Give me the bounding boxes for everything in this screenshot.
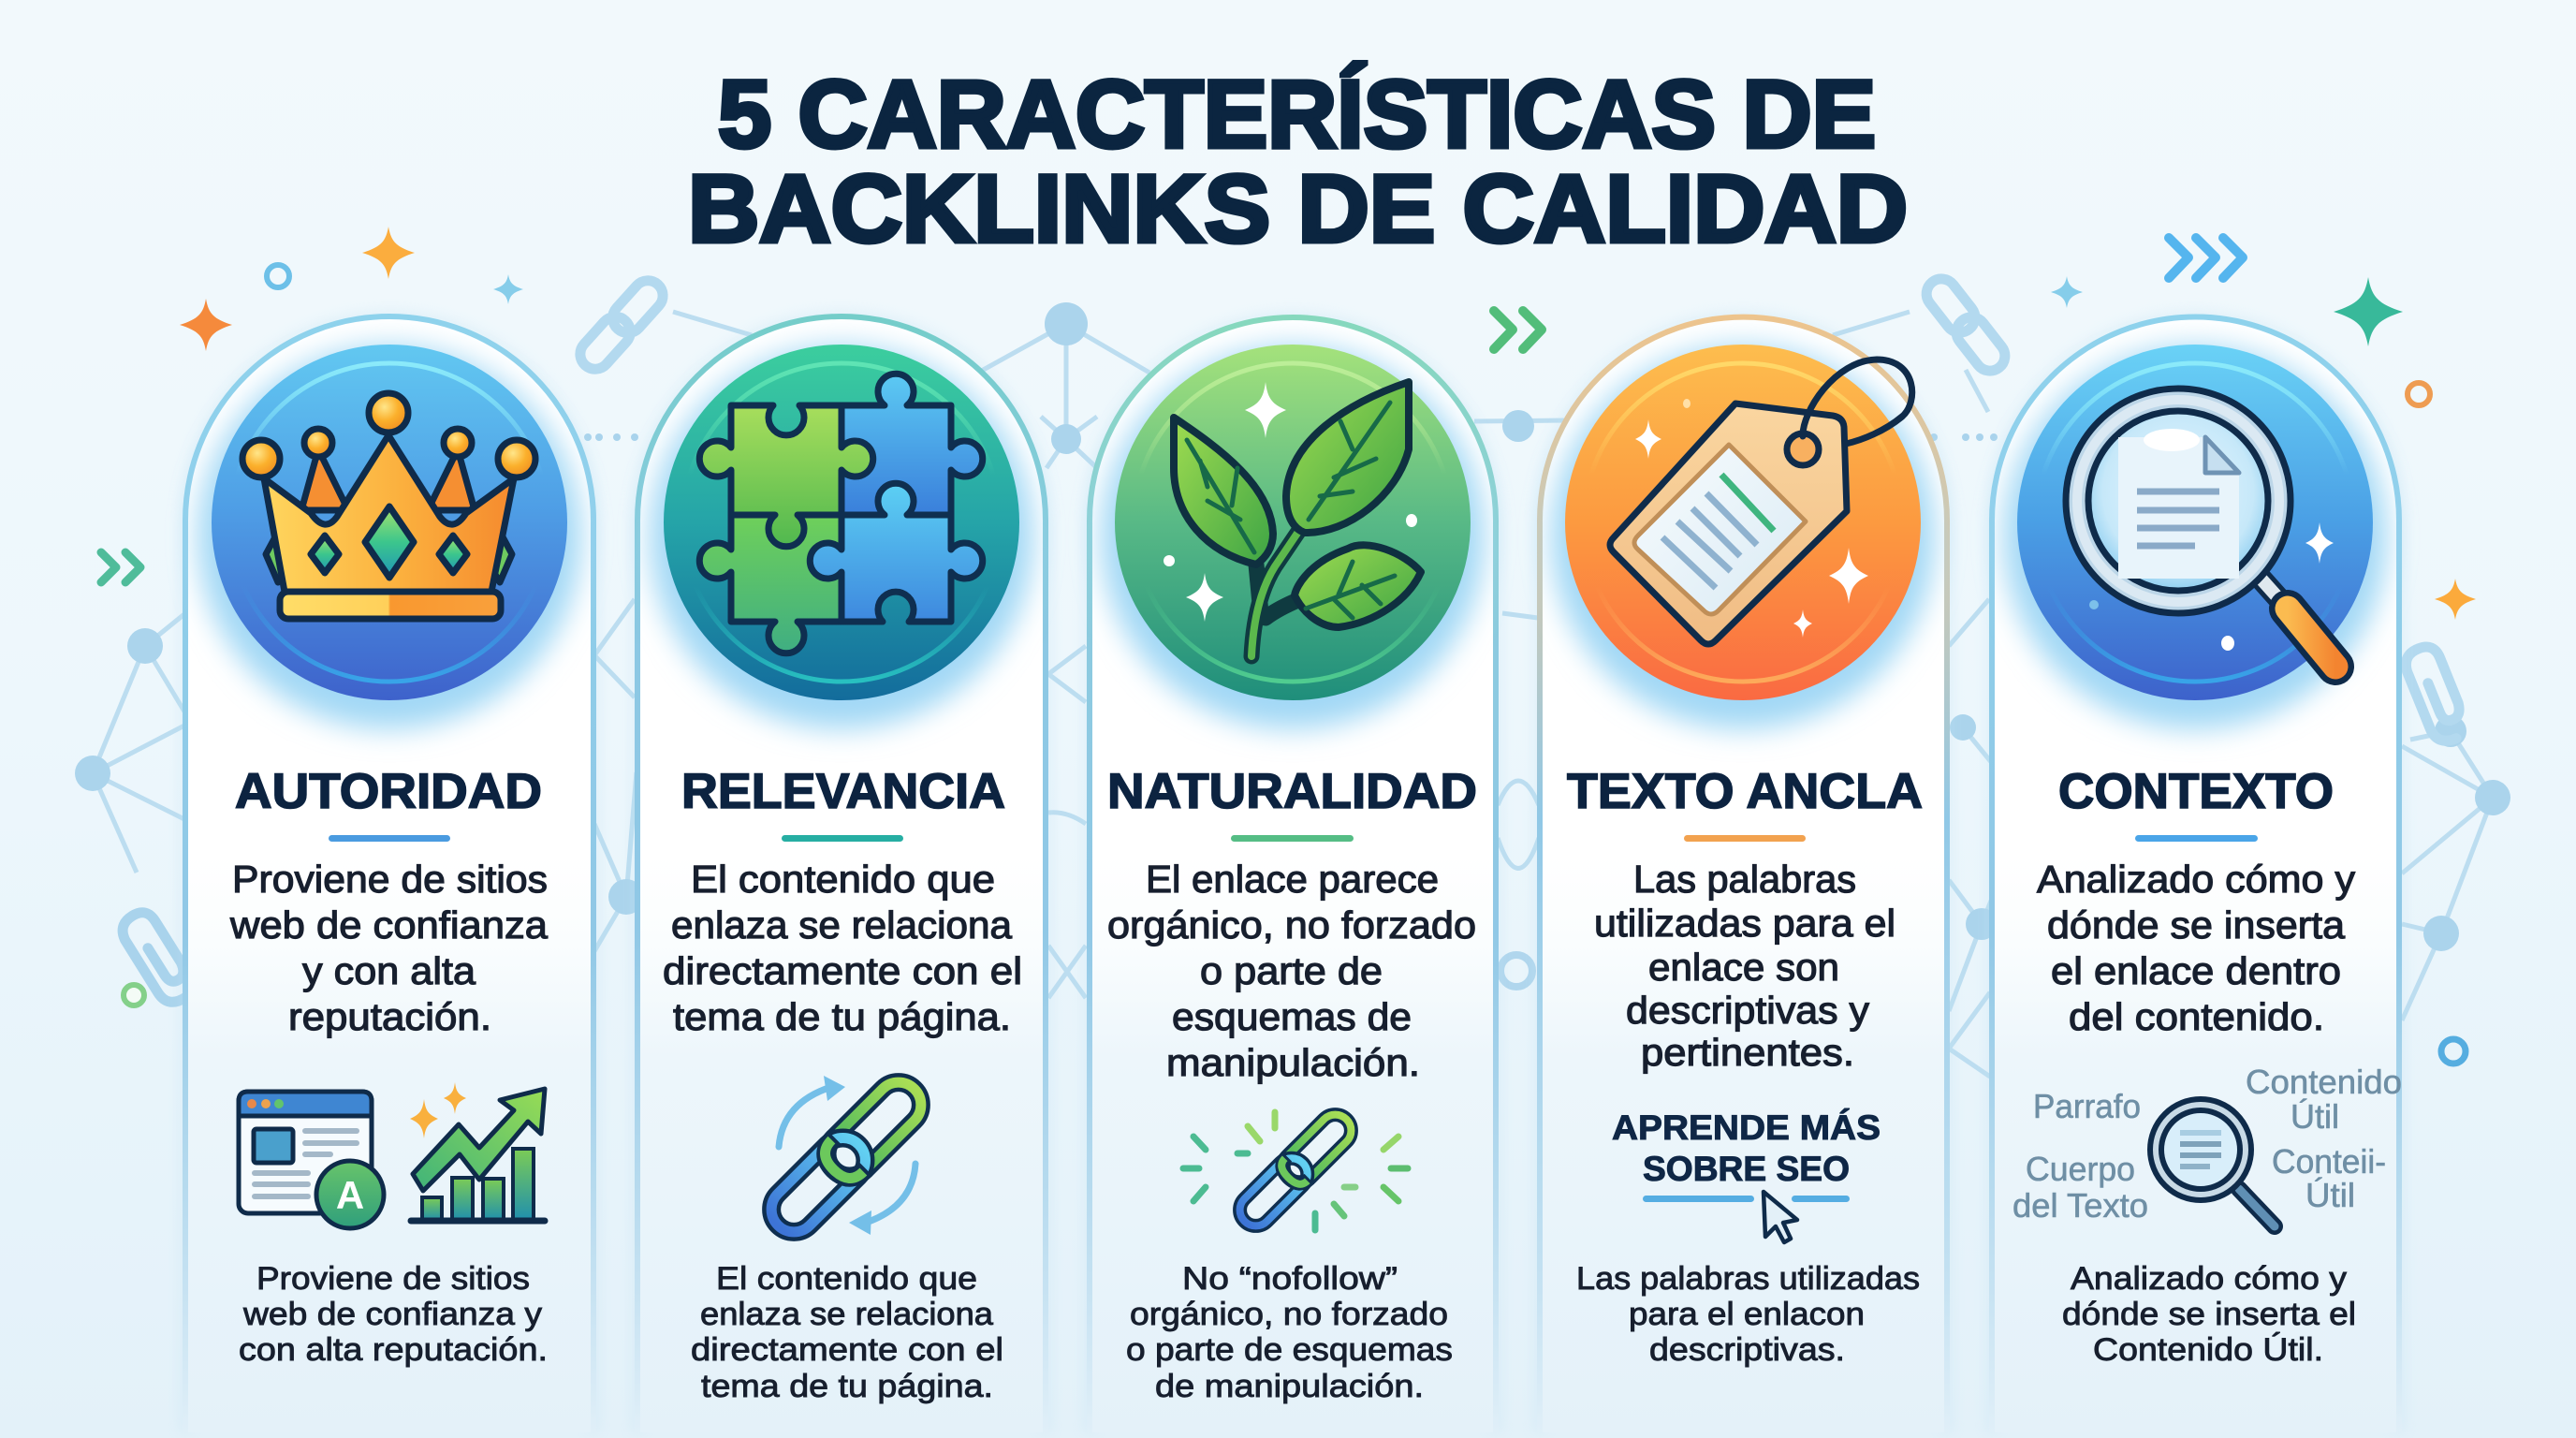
icon: magnifier with labels: Útil	[2305, 1176, 2355, 1214]
icon: magnifier with labels: del Texto	[2012, 1186, 2148, 1225]
description: esquemas de	[1172, 995, 1412, 1038]
description	[2037, 858, 2356, 1038]
icon circle: magnifier	[2003, 345, 2387, 729]
icon: chevrons blue	[2169, 238, 2243, 278]
description	[1594, 858, 1895, 1074]
caption: tema de tu página.	[701, 1369, 993, 1404]
description: El enlace parece	[1146, 858, 1439, 901]
icon: background chain link left	[574, 274, 669, 375]
icon: chevrons left	[101, 552, 140, 582]
caption	[239, 1261, 548, 1368]
caption	[1126, 1261, 1453, 1404]
caption	[1576, 1261, 1920, 1368]
caption: Contenido Útil.	[2093, 1332, 2323, 1368]
icon circle: crown	[198, 345, 581, 729]
description: reputación.	[288, 995, 491, 1038]
title: 5 CARACTERÍSTICAS DE	[718, 61, 1876, 168]
icon circle: tag	[1551, 345, 1935, 729]
icon: magnifier with labels: Conteii-	[2272, 1142, 2386, 1181]
description: tema de tu página.	[673, 995, 1011, 1038]
title: BACKLINKS DE CALIDAD	[688, 155, 1908, 262]
caption: Analizado cómo y	[2071, 1261, 2347, 1297]
description: utilizadas para el	[1594, 902, 1895, 945]
icon: chain with arrows	[762, 1073, 930, 1241]
description	[663, 858, 1022, 1038]
caption: descriptivas.	[1649, 1332, 1845, 1368]
description	[229, 858, 548, 1038]
caption: de manipulación.	[1155, 1369, 1424, 1404]
icon circle: leaves	[1101, 345, 1485, 729]
description: Analizado cómo y	[2037, 858, 2356, 901]
caption: Las palabras utilizadas	[1576, 1261, 1920, 1297]
description: El contenido que	[691, 858, 995, 901]
description: del contenido.	[2069, 995, 2324, 1038]
caption: con alta reputación.	[239, 1332, 548, 1368]
panel: texto ancla	[1540, 317, 1947, 1432]
description: enlaza se relaciona	[671, 903, 1012, 946]
icon: magnifier with labels	[2012, 1063, 2402, 1226]
icon: magnifier with labels: Parrafo	[2033, 1087, 2141, 1125]
caption: No “nofollow”	[1182, 1261, 1398, 1297]
accent rule	[1231, 835, 1354, 842]
caption	[691, 1261, 1003, 1404]
icon circle: puzzle	[650, 345, 1033, 729]
accent rule	[1684, 835, 1806, 842]
caption: Proviene de sitios	[256, 1261, 530, 1297]
icon: magnifier with labels: Contenido	[2246, 1063, 2402, 1101]
icon: paperclip left	[116, 907, 198, 1008]
panel: relevancia	[637, 316, 1046, 1432]
icon: website and growth chart	[239, 1082, 545, 1228]
description: manipulación.	[1166, 1041, 1420, 1084]
icon: background chain link right	[1921, 272, 2011, 377]
caption: directamente con el	[691, 1332, 1003, 1368]
description: web de confianza	[229, 903, 548, 946]
call to action: aprende más sobre seo: APRENDE MÁS	[1612, 1108, 1881, 1147]
description: enlace son	[1648, 946, 1839, 989]
heading: CONTEXTO	[2058, 764, 2334, 819]
icon: paperclip right	[2401, 642, 2470, 746]
icon: website and growth chart: A	[336, 1173, 364, 1217]
icon: link with rays	[1183, 1108, 1408, 1232]
caption: orgánico, no forzado	[1130, 1297, 1448, 1332]
description: y con alta	[302, 949, 476, 992]
caption: o parte de esquemas	[1126, 1332, 1453, 1368]
title	[688, 61, 1908, 262]
description: directamente con el	[663, 949, 1022, 992]
accent rule	[329, 835, 450, 842]
description: Las palabras	[1633, 858, 1856, 901]
background network	[75, 302, 2510, 1077]
accent rule	[782, 835, 903, 842]
icon: chevrons green	[1494, 311, 1542, 349]
panel: autoridad	[185, 316, 593, 1432]
description: el enlace dentro	[2051, 949, 2341, 992]
call to action: aprende más sobre seo: SOBRE SEO	[1643, 1150, 1850, 1188]
description: descriptivas y	[1626, 989, 1870, 1032]
description: orgánico, no forzado	[1107, 903, 1476, 946]
caption	[2062, 1261, 2356, 1368]
caption: para el enlacon	[1629, 1297, 1865, 1332]
heading: TEXTO ANCLA	[1567, 764, 1923, 819]
caption: dónde se inserta el	[2062, 1297, 2356, 1332]
description: o parte de	[1200, 949, 1383, 992]
heading: AUTORIDAD	[235, 764, 542, 819]
panel: naturalidad	[1090, 317, 1496, 1432]
icon: magnifier with labels: Cuerpo	[2026, 1150, 2135, 1188]
decorative stars and rings	[124, 227, 2476, 1064]
description	[1107, 858, 1476, 1084]
call to action: aprende más sobre seo	[1612, 1108, 1881, 1242]
icon: magnifier with labels: Útil	[2291, 1097, 2339, 1136]
caption: El contenido que	[716, 1261, 977, 1297]
panel: contexto	[1992, 316, 2402, 1432]
description: Proviene de sitios	[232, 858, 548, 901]
description: pertinentes.	[1641, 1031, 1854, 1074]
accent rule	[2135, 835, 2258, 842]
heading: NATURALIDAD	[1107, 764, 1477, 819]
heading: RELEVANCIA	[681, 764, 1005, 819]
caption: enlaza se relaciona	[700, 1297, 993, 1332]
caption: web de confianza y	[242, 1297, 542, 1332]
dotted connectors	[584, 433, 1998, 441]
description: dónde se inserta	[2047, 903, 2345, 946]
